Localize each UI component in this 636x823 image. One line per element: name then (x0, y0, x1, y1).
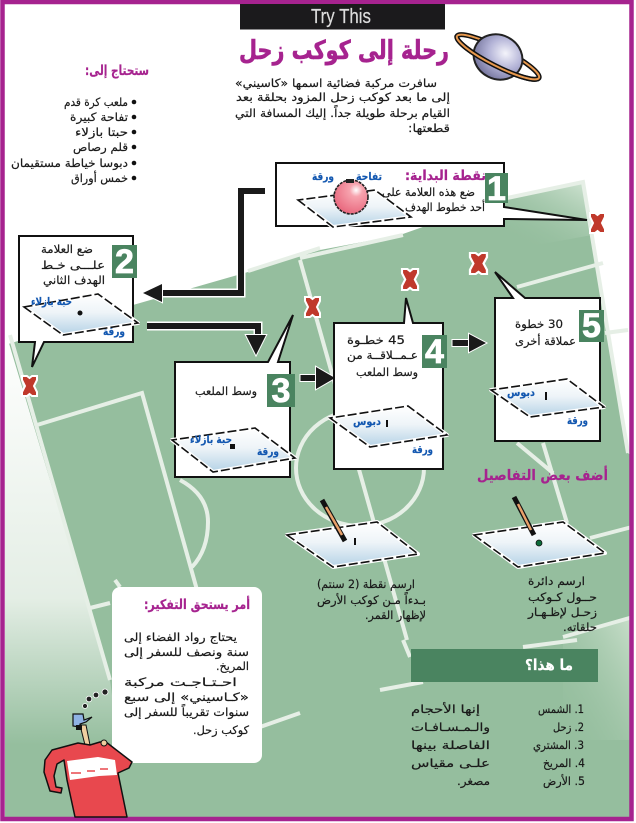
label paper: ورقة (312, 171, 334, 183)
label pin: دبوس (507, 387, 536, 399)
thought text: سنوات تقريباً للسفر إلى (124, 703, 249, 720)
rings instruction text: حــول كـوكب (528, 590, 597, 605)
explanation text: مصغر. (457, 774, 490, 789)
header bar: Try This: Try This (311, 6, 371, 28)
rings instruction text (527, 574, 597, 634)
thought text: احـتـاجـت مركبة (124, 675, 237, 690)
label pea: حبة بازلاء (190, 434, 232, 446)
list: planets: 1. الشمس (538, 702, 584, 717)
intro text: قطعتها: (408, 121, 450, 135)
panel: step 4 (330, 298, 447, 469)
step 4 text: 45 خطـوة (347, 333, 405, 348)
speech box 3 (175, 315, 293, 477)
moon instruction text: لإظهار القمر. (365, 608, 426, 623)
materials list (11, 95, 136, 186)
marker X 2 (22, 376, 37, 396)
white shirt band (67, 757, 117, 780)
materials list: حبتا بازلاء (75, 125, 128, 140)
step 5 text: عملاقة أخرى (515, 333, 576, 349)
arrow: step 1 to step 2 (143, 191, 265, 302)
red shirt (44, 742, 132, 817)
label pea: حبة بازلاء (31, 296, 72, 308)
moon instruction text (317, 577, 426, 623)
thought text: يحتاج رواد الفضاء إلى (124, 630, 237, 645)
arrow: step 2 to step 3 (147, 326, 266, 355)
icon: pencil right (514, 497, 534, 535)
moon instruction text: ارسم نقطة (2 سنتم) (317, 577, 415, 592)
cap (73, 714, 92, 730)
intro text: إلى ما بعد كوكب زحل المزود بحلقة بعد (236, 90, 450, 105)
label paper: ورقة (412, 444, 433, 456)
badge 5: 5 (582, 307, 601, 345)
explanation text: علـى مقياس (411, 756, 490, 771)
marker X 5 (470, 253, 487, 274)
step 5 text (515, 317, 576, 349)
panel: step 3 (172, 315, 295, 477)
label pin: دبوس (353, 416, 382, 428)
step 4 text: وسط الملعب (356, 365, 418, 380)
intro text: القيام برحلة طويلة جداً. إليك المسافة التي (235, 104, 450, 121)
neck and head (80, 725, 90, 750)
rings instruction text: حلقاته. (563, 620, 597, 634)
explanation text (411, 702, 490, 789)
thought dots (82, 689, 108, 708)
rings instruction text: ارسم دائرة (528, 574, 585, 589)
banner: what is this (411, 649, 598, 682)
badge 2: 2 (115, 243, 134, 281)
icon: apple (334, 179, 368, 214)
marker X 3 (305, 297, 320, 317)
explanation text: إنها الأحجام (411, 702, 480, 716)
marker X 1 (590, 213, 605, 233)
materials list: خمس أوراق (71, 170, 128, 186)
step 1 text: أحد خطوط الهدف (405, 199, 485, 215)
paper sheet 5 (491, 379, 604, 417)
speech box 1 (276, 163, 587, 226)
step 4 text (347, 333, 418, 380)
title: رحلة إلى كوكب زحل (239, 36, 449, 66)
step 5 text: 30 خطوة (515, 317, 563, 332)
paper sheet 4 (330, 406, 447, 447)
step 2 text: ضع العلامة (41, 242, 93, 256)
icon: saturn (447, 17, 549, 97)
step 2 text (41, 242, 105, 287)
banner: what is this: ما هذا؟ (525, 656, 573, 674)
rings instruction text: زحـل لإظـهـار (527, 605, 597, 620)
label paper: ورقة (567, 415, 588, 427)
thought text: سنة ونصف للسفر إلى (124, 645, 249, 660)
intro text (235, 76, 450, 135)
materials list: قلم رصاص (73, 140, 128, 155)
badge 4: 4 (425, 333, 444, 371)
background: football field (5, 182, 633, 818)
step 3 text: وسط الملعب (195, 384, 257, 399)
explanation text: الفاصلة بينها (411, 738, 490, 752)
thought text: «كـاسيني» إلى سبع (124, 690, 249, 704)
step 1 text: ضع هذه العلامة على (382, 185, 475, 199)
illustration: rings drawing (474, 497, 605, 567)
label paper: ورقة (103, 326, 125, 338)
panel: food for thought (112, 587, 262, 763)
list: planets: 4. المريخ (543, 756, 585, 771)
badge 3 (267, 372, 295, 410)
speech box 5 (495, 272, 600, 441)
panel: step 2 (19, 236, 138, 367)
moon instruction text: بـدءاً مـن كوكب الأرض (317, 591, 426, 608)
paper sheet 1 (298, 190, 411, 227)
materials heading: ستحتاج إلى: (85, 63, 149, 79)
shirt dashes (71, 769, 108, 773)
materials list: تفاحة كبيرة (70, 110, 128, 125)
arrow: step 3 to step 4 (300, 367, 335, 389)
speech box 4 (334, 298, 443, 469)
step 2 text: علـــى خـط (41, 258, 105, 272)
list: planets (533, 702, 585, 789)
icon: pencil left (322, 500, 345, 541)
thought text (124, 630, 250, 738)
list: planets: 3. المشتري (533, 738, 584, 753)
badge 1: 1 (487, 170, 506, 208)
materials list: ملعب كرة قدم (64, 95, 128, 110)
intro text: سافرت مركبة فضائية اسمها «كاسيني» (235, 76, 437, 91)
list: planets: 5. الأرض (543, 774, 585, 789)
thought text: المريخ. (216, 659, 249, 674)
hand (101, 740, 107, 746)
step 4 text: عـمــلاقــة من (347, 348, 418, 363)
step 1 text (382, 185, 485, 215)
materials list: دبوسا خياطة مستقيمان (11, 156, 128, 171)
arrow: step 4 to step 5 (452, 334, 486, 352)
header bar: Try This (240, 4, 445, 30)
list: planets: 2. زحل (553, 720, 584, 735)
paper sheet 2 (24, 294, 138, 335)
label apple: تفاحة (356, 171, 382, 183)
badge 3: 3 (272, 372, 290, 410)
illustration: thinking boy (44, 689, 132, 817)
step 1 heading: نقطة البداية: (405, 168, 486, 184)
thought heading: أمر يستحق التفكير: (144, 596, 250, 613)
thought text: كوكب زحل. (193, 723, 250, 738)
panel: step 5 (491, 272, 604, 441)
illustration: moon drawing (287, 500, 418, 567)
heading: add details: أضف بعض التفاصيل (477, 466, 608, 484)
explanation text: والـمـسـافـات (411, 720, 490, 735)
marker X 4 (402, 269, 418, 290)
step 2 text: الهدف الثاني (43, 273, 105, 287)
panel: step 1 (276, 163, 587, 227)
label paper: ورقة (257, 446, 279, 458)
speech box 2 (19, 236, 133, 367)
paper sheet 3 (172, 428, 295, 472)
